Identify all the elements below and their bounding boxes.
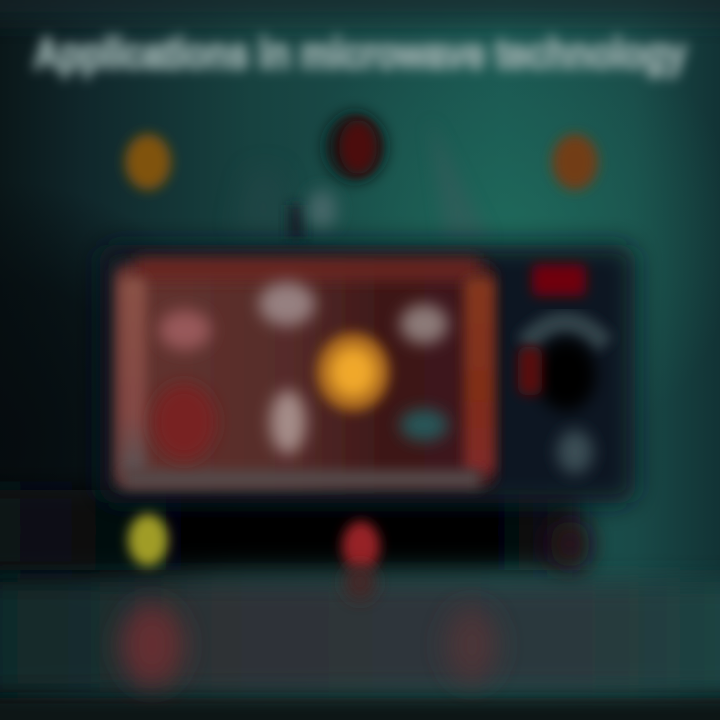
icon: small antenna	[288, 190, 337, 239]
floor reflection: left red	[120, 603, 184, 687]
grey button	[557, 430, 593, 474]
bottom grey sill	[124, 470, 480, 488]
food blob: dark red	[152, 384, 216, 460]
left door edge	[120, 278, 146, 473]
black shadow band	[0, 490, 580, 570]
food blob: right white	[400, 304, 448, 344]
glowing yellow sun	[316, 332, 390, 412]
red display	[532, 264, 586, 296]
icon: red circle	[342, 521, 380, 600]
dial centre	[536, 339, 596, 411]
food blob: top white	[259, 282, 315, 326]
dial arc	[525, 322, 605, 345]
panel: microwave window	[114, 258, 496, 488]
food blob: pink	[159, 310, 211, 350]
microwave body	[100, 245, 635, 503]
top red band	[135, 258, 480, 280]
panel: control panel	[518, 264, 605, 474]
right door edge	[464, 278, 494, 473]
icon: yellow circle	[128, 514, 168, 566]
floor	[0, 582, 720, 720]
icon: dark red circle	[325, 113, 385, 181]
food blob: bottom white	[270, 390, 306, 454]
floor reflection: right red	[446, 607, 498, 683]
icon: orange circle	[125, 134, 171, 190]
red knob	[518, 347, 542, 395]
icon: rust circle	[552, 134, 598, 190]
icon: faint dark red circle	[550, 520, 590, 568]
food blob: teal	[400, 409, 448, 441]
